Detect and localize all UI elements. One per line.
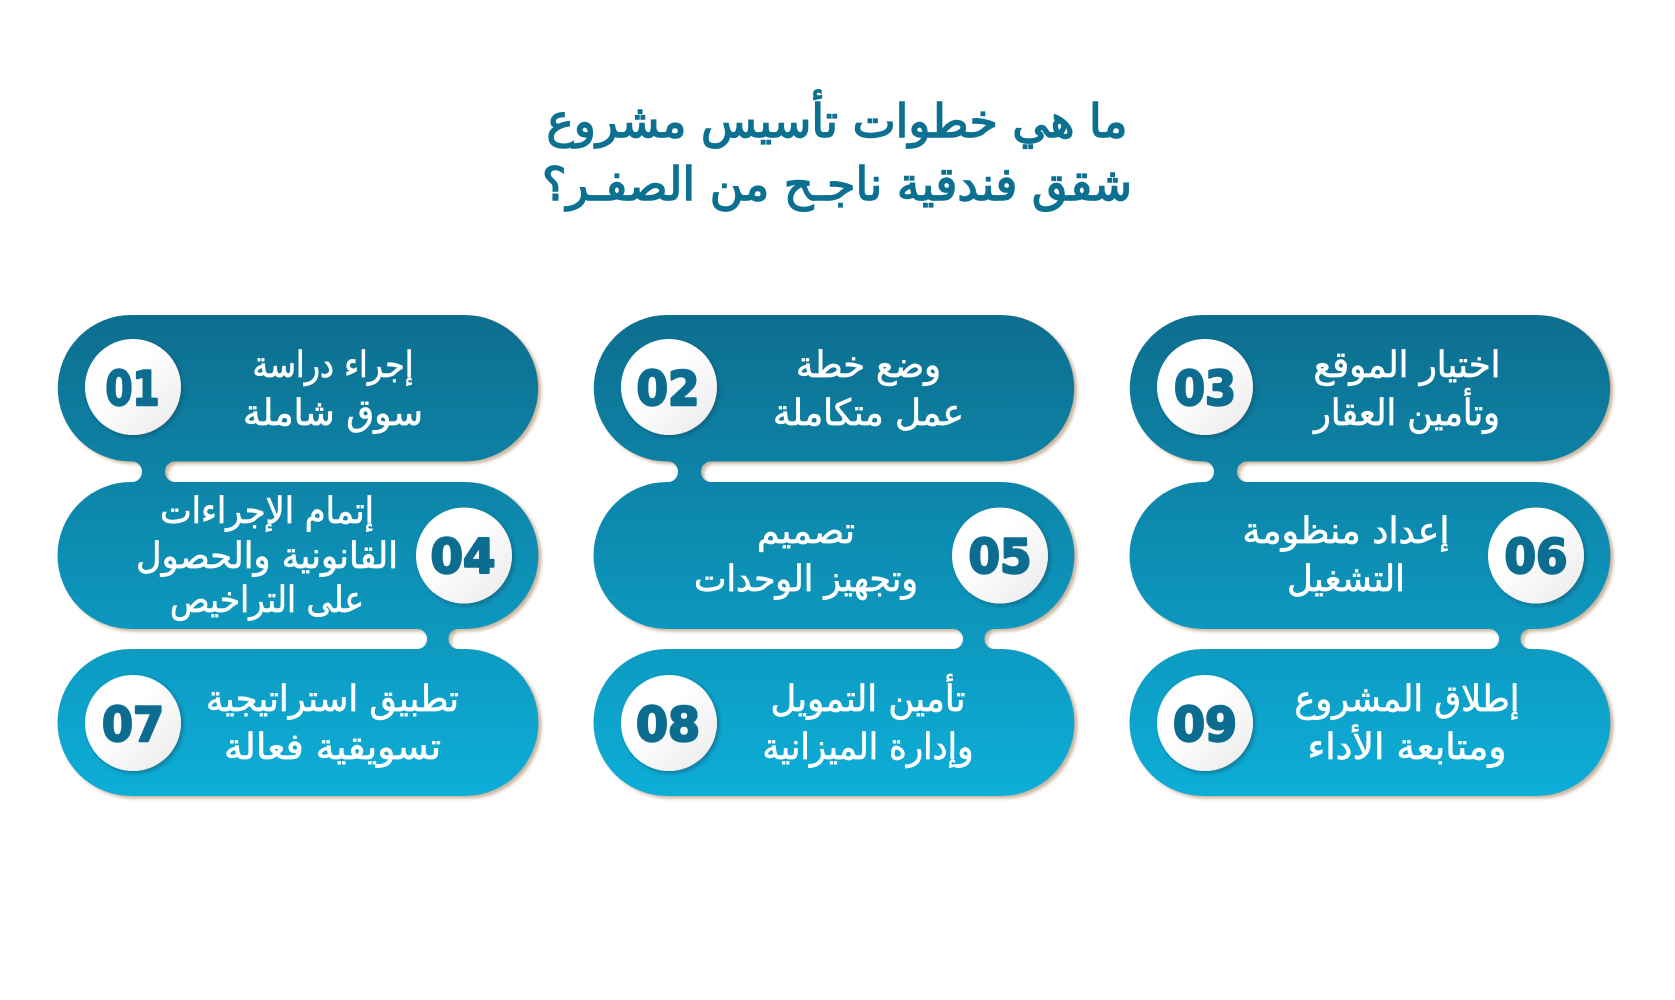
step 04: 04 (430, 530, 496, 585)
panel: left column background (57, 315, 538, 796)
step 02: وضع خطة (796, 345, 941, 386)
step 07 (85, 675, 459, 771)
step 05: وتجهيز الوحدات (694, 559, 918, 600)
step 02: 02 (636, 362, 700, 417)
step 09: 09 (1173, 698, 1237, 753)
step 07: تسويقية فعالة (224, 727, 441, 768)
panel: middle column background (594, 315, 1074, 796)
step 08: تأمين التمويل (770, 674, 966, 720)
step 04: القانونية والحصول (136, 536, 398, 577)
step 08: وإدارة الميزانية (762, 727, 974, 768)
step 07: 07 (102, 698, 164, 753)
step 03: اختيار الموقع (1314, 345, 1500, 386)
step 01: إجراء دراسة (252, 345, 414, 386)
step 06: التشغيل (1287, 559, 1405, 600)
title: ما هي خطوات تأسيس مشروع (546, 89, 1128, 149)
step 05: 05 (968, 530, 1032, 585)
step 01: 01 (106, 362, 160, 417)
step 09: إطلاق المشروع (1294, 679, 1520, 720)
step 06: إعداد منظومة (1242, 511, 1450, 552)
step 01 (85, 339, 423, 435)
step 05 (694, 508, 1048, 604)
step 06 (1242, 508, 1584, 604)
panel: right column background (1130, 315, 1610, 796)
step 04: إتمام الإجراءات (160, 491, 374, 532)
step 03 (1157, 339, 1500, 435)
title: شقق فندقية ناجـح من الصفـر؟ (542, 157, 1132, 212)
step 06: 06 (1504, 530, 1568, 585)
step 05: تصميم (757, 511, 855, 552)
step 09 (1157, 675, 1520, 771)
step 08 (621, 674, 974, 771)
title (542, 89, 1132, 212)
step 04 (136, 491, 512, 621)
step 04: على التراخيص (170, 580, 364, 621)
step 03: 03 (1174, 362, 1236, 417)
step 02: عمل متكاملة (773, 393, 964, 434)
step 08: 08 (636, 698, 700, 753)
step 01: سوق شاملة (243, 393, 423, 434)
step 07: تطبيق استراتيجية (206, 679, 459, 720)
step 03: وتأمين العقار (1312, 388, 1500, 434)
step 09: ومتابعة الأداء (1308, 724, 1506, 768)
step 02 (621, 339, 964, 435)
